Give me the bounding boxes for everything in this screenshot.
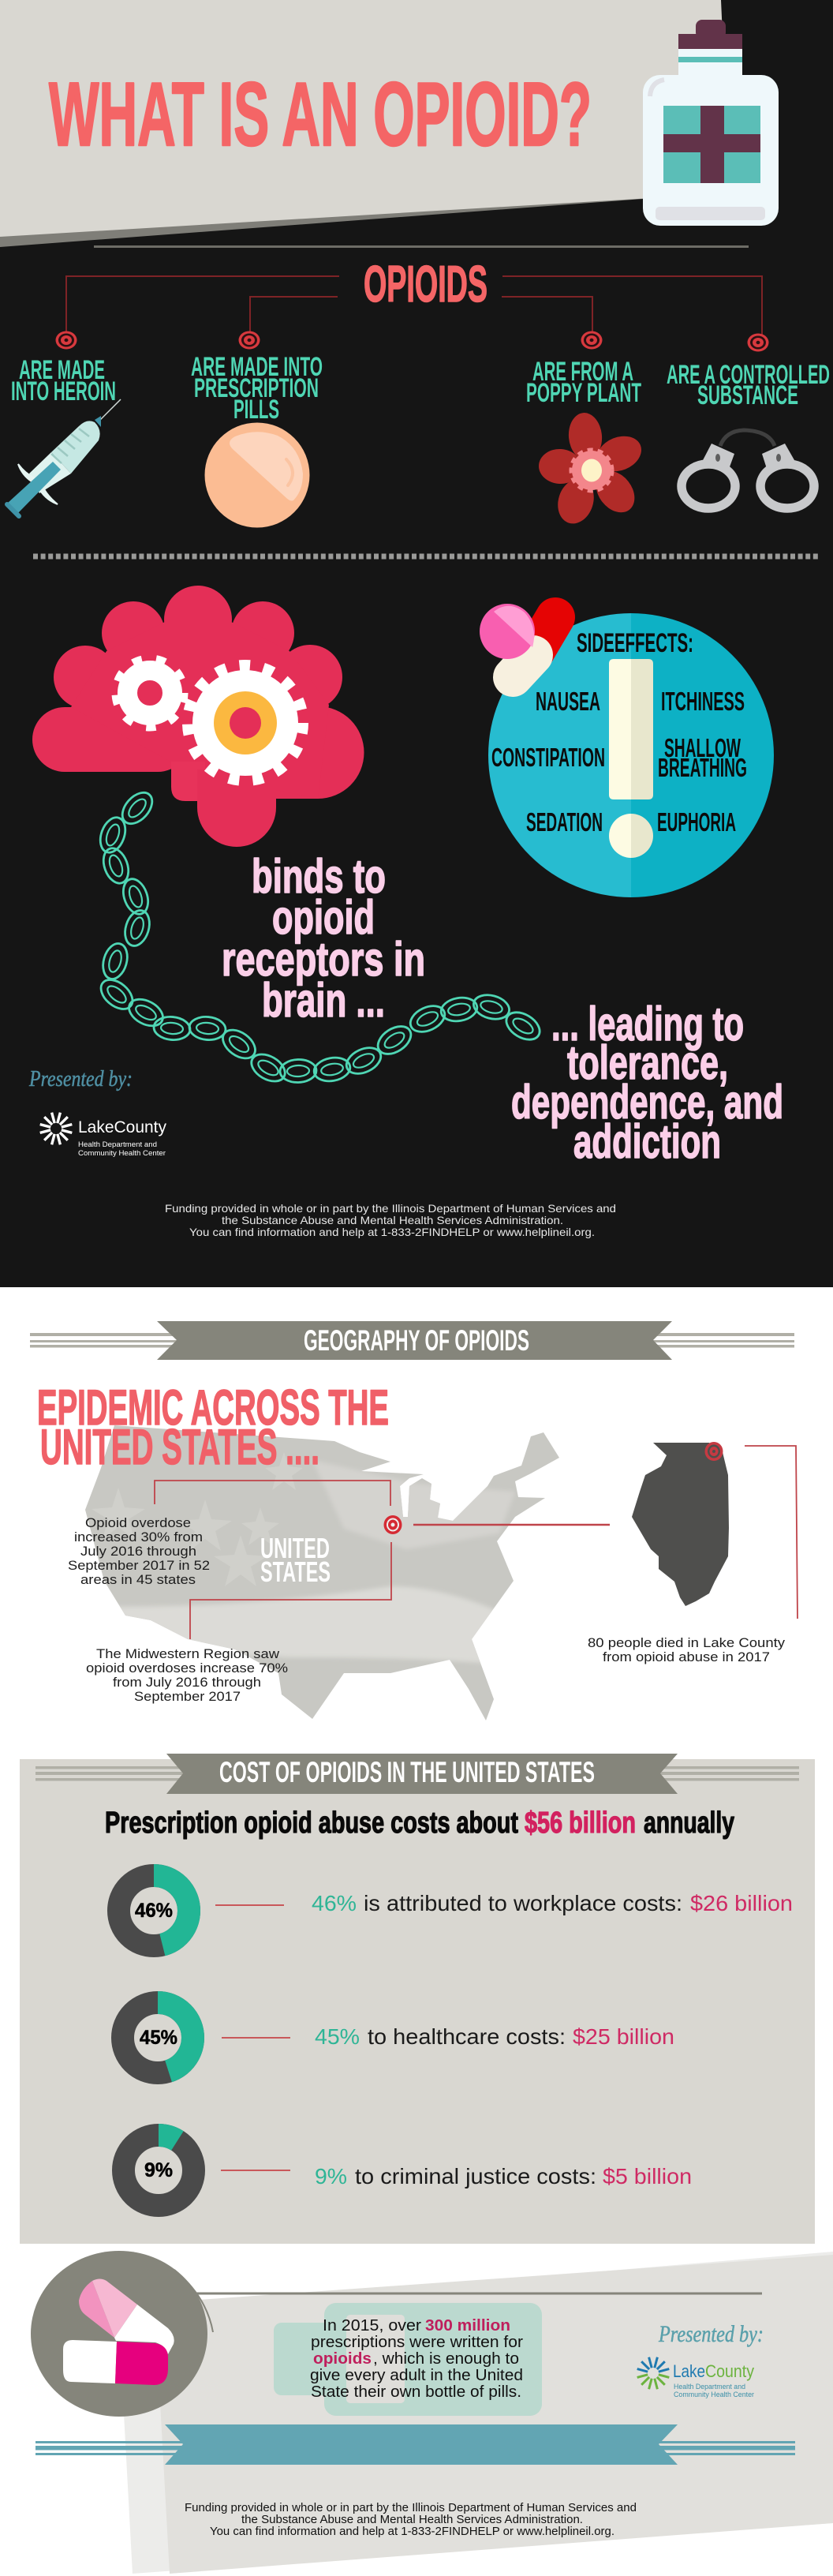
presented by: footer: Presented by: <box>658 2321 764 2347</box>
funding text: Funding provided in whole or in part by the Illinois Department of Human Services and <box>165 1202 616 1215</box>
banner: geography of opioids <box>30 1321 794 1360</box>
logo: Lake County white: Community Health Center <box>78 1149 166 1157</box>
text: binds to opioid receptors: receptors in <box>222 933 425 986</box>
label: are made into prescription pills <box>191 352 323 425</box>
text: binds to opioid receptors: opioid <box>272 891 375 944</box>
text: lake county deaths: 80 people died in Lake County <box>588 1636 786 1650</box>
callout line: criminal justice <box>221 2170 290 2171</box>
text: healthcare costs: $25 billion <box>573 2024 674 2049</box>
text: healthcare costs: 45% <box>315 2024 360 2049</box>
donut chart: 9% <box>123 2136 194 2205</box>
text: criminal justice costs: to criminal justice costs: <box>355 2164 596 2188</box>
icon: handcuffs <box>682 430 814 508</box>
icon: chain <box>95 787 544 1087</box>
heading: annual cost: annually <box>644 1807 734 1840</box>
text: opioid overdose: increased 30% from <box>74 1530 203 1544</box>
label: are from a poppy plant <box>526 357 641 408</box>
text: lake county deaths <box>588 1636 786 1664</box>
donut chart: 45% <box>123 2003 192 2072</box>
funding text: footer <box>185 2502 637 2538</box>
text: opioid overdose: Opioid overdose <box>85 1516 191 1530</box>
funding text: You can find information and help at 1-833-2FINDHELP or www.helplineil.org. <box>189 1226 595 1238</box>
map label: united states <box>260 1532 331 1588</box>
text: binds to opioid receptors: brain ... <box>262 974 385 1027</box>
side effects text: ITCHINESS <box>661 687 745 716</box>
icon: pale bottle <box>274 2303 542 2416</box>
text: midwestern region: opioid overdoses increase 70% <box>86 1661 288 1676</box>
label: are a controlled substance <box>667 360 830 410</box>
text: opioid overdose: areas in 45 states <box>80 1573 196 1587</box>
funding text <box>165 1202 616 1238</box>
icon: poppy flower <box>538 411 647 528</box>
side effects text: NAUSEA <box>536 687 600 716</box>
logo: Lake County white: LakeCounty <box>78 1118 166 1136</box>
heading: epidemic across the united states: EPIDEMIC ACROSS THE <box>37 1380 389 1436</box>
label: are made into prescription pills: PILLS <box>233 395 279 425</box>
text: opioid overdose <box>68 1516 210 1587</box>
icon: capsule and pink pill <box>480 604 555 677</box>
divider rule <box>94 245 749 248</box>
logo: Lake County colour: County <box>705 2361 754 2381</box>
callout line: workplace <box>215 1904 284 1906</box>
callout line: healthcare <box>222 2037 290 2039</box>
rule <box>196 2292 762 2295</box>
exclamation mark <box>609 659 653 858</box>
text: criminal justice costs: $5 billion <box>603 2164 692 2188</box>
heading: annual cost: $56 billion <box>525 1807 636 1840</box>
dark background panel <box>0 0 833 1287</box>
dotted divider <box>33 554 818 559</box>
side effects text: CONSTIPATION <box>491 743 605 772</box>
map: Illinois <box>632 1442 729 1606</box>
donut chart: 46%: 46% <box>135 1900 173 1922</box>
map label: united states: UNITED <box>260 1532 330 1564</box>
side effects text: BREATHING <box>658 753 747 782</box>
side effects circle <box>488 613 774 897</box>
icon: pills in grey circle <box>31 2251 213 2417</box>
banner: cost of opioids: COST OF OPIOIDS IN THE UNITED STATES <box>219 1756 595 1788</box>
footer wedge <box>118 2252 833 2574</box>
text: 300 million prescriptions: State their own bottle of pills. <box>311 2383 521 2401</box>
logo: Lake County colour <box>637 2357 754 2398</box>
text: workplace costs: $26 billion <box>690 1891 793 1915</box>
text: midwestern region: The Midwestern Region saw <box>96 1647 279 1661</box>
label: are made into prescription pills: PRESCRIPTION <box>194 373 319 403</box>
logo: Lake County colour: Community Health Center <box>674 2391 754 2398</box>
text: lake county deaths: from opioid abuse in 2017 <box>603 1650 770 1664</box>
logo: Lake County white <box>40 1113 166 1157</box>
banner: geography of opioids: GEOGRAPHY OF OPIOIDS <box>304 1324 529 1357</box>
text: leading to tolerance <box>511 998 783 1168</box>
target markers <box>55 331 768 352</box>
text: 300 million prescriptions: opioids <box>313 2350 372 2368</box>
text: 300 million prescriptions: give every adult in the United <box>310 2367 523 2384</box>
text: opioid overdose: July 2016 through <box>80 1544 196 1559</box>
text: leading to tolerance: addiction <box>573 1115 721 1168</box>
text: workplace costs: 46% <box>312 1891 357 1915</box>
label: are made into heroin <box>11 355 116 406</box>
funding text: footer: the Substance Abuse and Mental Health Services Administration. <box>241 2514 583 2526</box>
funding text: footer: You can find information and help at 1-833-2FINDHELP or www.helplineil.org. <box>210 2525 614 2538</box>
funding text: the Substance Abuse and Mental Health Services Administration. <box>222 1214 563 1226</box>
logo: Lake County colour: Health Department and <box>674 2383 745 2391</box>
map label: united states: STATES <box>260 1556 331 1588</box>
text: 300 million prescriptions: , which is enough to <box>373 2350 519 2368</box>
text: criminal justice costs <box>315 2164 692 2188</box>
text: healthcare costs: to healthcare costs: <box>368 2024 566 2049</box>
label: are from a poppy plant: ARE FROM A <box>532 357 633 387</box>
icon: brain with gears <box>32 586 364 847</box>
map: United States <box>79 1421 568 1728</box>
heading: epidemic across the united states <box>37 1380 389 1475</box>
banner: teal ribbon <box>35 2424 795 2465</box>
icon: round pill <box>205 423 309 527</box>
text: leading to tolerance: ... leading to <box>551 998 744 1050</box>
heading: epidemic across the united states: UNITED STATES .... <box>40 1420 319 1475</box>
funding text: footer: Funding provided in whole or in part by the Illinois Department of Human Services and <box>185 2502 637 2514</box>
text: 300 million prescriptions: 300 million <box>425 2317 510 2334</box>
label: are made into heroin: INTO HEROIN <box>11 376 116 406</box>
text: criminal justice costs: 9% <box>315 2164 347 2188</box>
text: workplace costs: is attributed to workplace costs: <box>364 1891 682 1915</box>
text: healthcare costs <box>315 2024 674 2049</box>
logo: Lake County white: Health Department and <box>78 1140 157 1148</box>
side effects text: SIDEEFFECTS: <box>577 628 693 658</box>
connector lines <box>66 276 762 335</box>
panel: cost of opioids <box>20 1754 815 2244</box>
label: are from a poppy plant: POPPY PLANT <box>526 378 641 408</box>
donut chart: 45%: 45% <box>140 2027 177 2049</box>
logo: Lake County colour: Lake <box>673 2361 705 2381</box>
text: binds to opioid receptors: binds to <box>252 850 386 903</box>
text: opioid overdose: September 2017 in 52 <box>68 1559 210 1573</box>
side effects text <box>491 628 747 837</box>
text: leading to tolerance: tolerance, <box>567 1036 728 1089</box>
text: workplace costs <box>312 1891 793 1915</box>
icon: syringe <box>7 399 121 516</box>
text: midwestern region: from July 2016 through <box>113 1676 261 1690</box>
side effects text: SEDATION <box>526 807 603 837</box>
label: are made into heroin: ARE MADE <box>19 355 105 385</box>
text: 300 million prescriptions: In 2015, over <box>323 2317 421 2334</box>
callout lines <box>155 1446 798 1639</box>
text: midwestern region: September 2017 <box>134 1690 241 1704</box>
text: 300 million prescriptions <box>310 2317 523 2401</box>
text: midwestern region <box>86 1647 288 1704</box>
heading: opioids: OPIOIDS <box>364 255 487 313</box>
donut chart: 46% <box>118 1875 189 1946</box>
side effects text: EUPHORIA <box>657 807 736 837</box>
text: 300 million prescriptions: prescriptions were written for <box>311 2334 523 2351</box>
presented by: Presented by: <box>28 1066 133 1091</box>
banner: cost of opioids <box>35 1754 799 1794</box>
label: are made into prescription pills: ARE MADE INTO <box>191 352 323 382</box>
heading: annual cost: Prescription opioid abuse costs about <box>105 1807 518 1840</box>
text: binds to opioid receptors <box>222 850 425 1027</box>
icon: medicine bottle <box>643 20 779 226</box>
header wedge <box>0 0 730 247</box>
map target marker <box>383 1515 402 1534</box>
donut chart: 9%: 9% <box>144 2159 173 2181</box>
side effects text: SHALLOW <box>664 733 741 762</box>
